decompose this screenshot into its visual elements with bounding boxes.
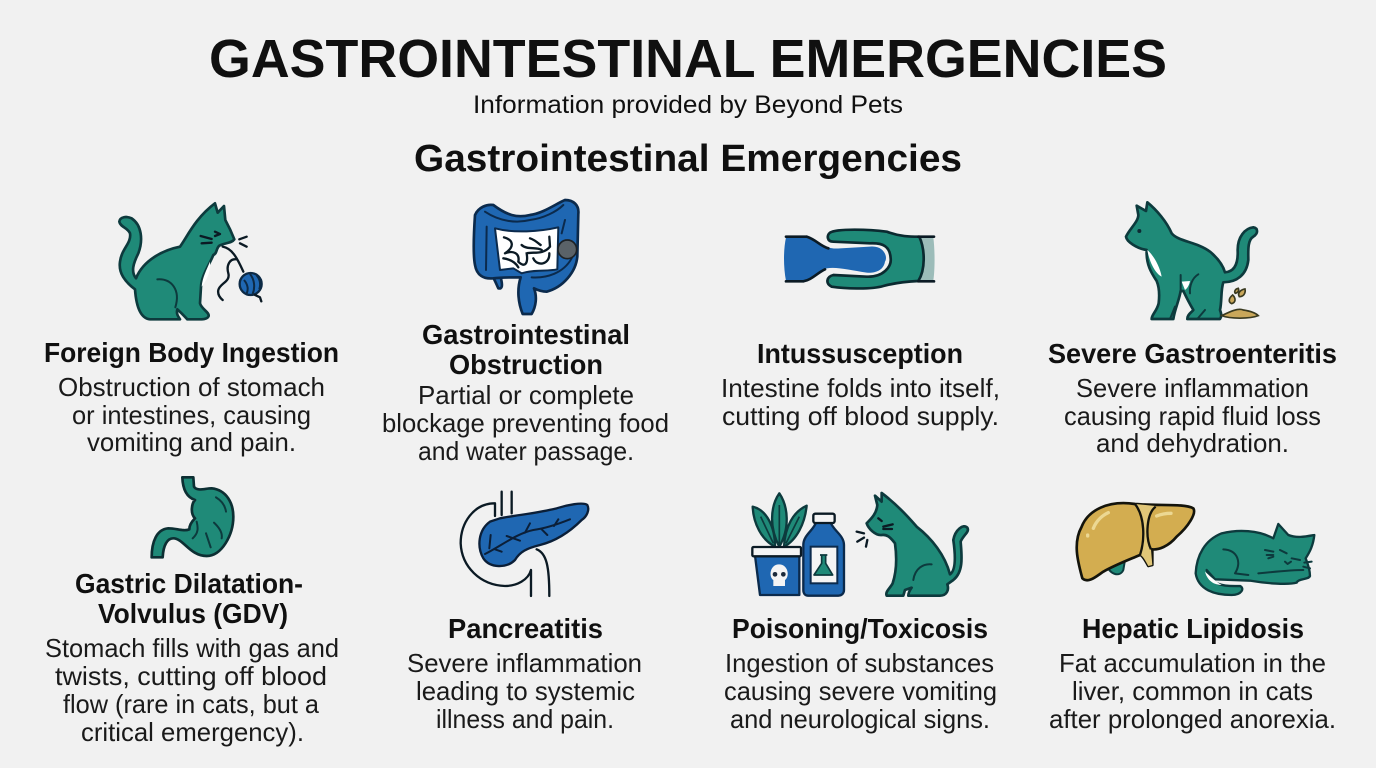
description: and water passage. (418, 436, 634, 466)
description (58, 372, 325, 457)
description (382, 380, 669, 466)
description (1049, 648, 1336, 734)
panel: severe gastroenteritis (1048, 202, 1337, 458)
heading: Intussusception (757, 338, 963, 369)
description: Stomach fills with gas and (45, 633, 339, 663)
heading: Gastric Dilatation- (75, 568, 303, 599)
panel: intussusception (721, 230, 1000, 431)
panel: pancreatitis (407, 492, 642, 734)
icon: telescoping intestine (784, 230, 935, 288)
liver (1077, 503, 1194, 580)
heading: Foreign Body Ingestion (44, 337, 339, 368)
description: cutting off blood supply. (722, 401, 999, 431)
sitting cat (857, 493, 968, 596)
description: leading to systemic (416, 676, 635, 706)
heading: Obstruction (449, 349, 603, 380)
subtitle: Information provided by Beyond Pets (473, 91, 903, 119)
icon: intestines with blockage (474, 200, 578, 314)
icon: stomach (152, 477, 233, 557)
heading (422, 319, 630, 380)
plant (753, 493, 807, 547)
heading: Severe Gastroenteritis (1048, 338, 1337, 369)
icon: cat with vomit (1126, 202, 1258, 319)
panel: hepatic lipidosis (1049, 503, 1336, 734)
icon: pancreas (461, 492, 588, 596)
pot with skull (752, 547, 801, 595)
description: twists, cutting off blood (55, 661, 327, 691)
description (45, 633, 339, 747)
description: vomiting and pain. (87, 427, 296, 457)
panel: poisoning/toxicosis (724, 493, 997, 734)
description: blockage preventing food (382, 408, 669, 438)
description: liver, common in cats (1072, 676, 1313, 706)
heading: Hepatic Lipidosis (1082, 613, 1304, 644)
icon: liver and sleeping cat (1077, 503, 1314, 595)
description: flow (rare in cats, but a (63, 689, 320, 719)
description: or intestines, causing (72, 400, 311, 430)
bottle with flask label (803, 514, 844, 596)
panel: gastrointestinal obstruction (382, 200, 669, 466)
panel: foreign body ingestion (44, 203, 339, 457)
panel: gastric dilatation-volvulus (45, 477, 339, 747)
description (407, 648, 642, 734)
description: and neurological signs. (730, 704, 990, 734)
title: GASTROINTESTINAL EMERGENCIES (209, 29, 1167, 89)
description: Intestine folds into itself, (721, 373, 1000, 403)
description: Partial or complete (418, 380, 634, 410)
description: critical emergency). (81, 717, 304, 747)
icon: toxic plant, bottle and cat (752, 493, 968, 596)
description: Fat accumulation in the (1059, 648, 1326, 678)
description: causing rapid fluid loss (1064, 401, 1321, 431)
description (721, 373, 1000, 431)
description: Severe inflammation (1076, 373, 1309, 403)
heading: Pancreatitis (448, 613, 603, 644)
heading: Poisoning/Toxicosis (732, 613, 988, 644)
description: Obstruction of stomach (58, 372, 325, 402)
heading: Volvulus (GDV) (98, 598, 288, 629)
description: Severe inflammation (407, 648, 642, 678)
description: after prolonged anorexia. (1049, 704, 1336, 734)
heading: Gastrointestinal (422, 319, 630, 350)
sleeping cat (1196, 524, 1314, 595)
description: causing severe vomiting (724, 676, 997, 706)
section heading: Gastrointestinal Emergencies (414, 138, 962, 180)
description (1064, 373, 1321, 458)
description: and dehydration. (1096, 428, 1289, 458)
description (724, 648, 997, 734)
heading (75, 568, 303, 629)
description: Ingestion of substances (725, 648, 994, 678)
description: illness and pain. (436, 704, 614, 734)
icon: cat with yarn (119, 203, 262, 319)
